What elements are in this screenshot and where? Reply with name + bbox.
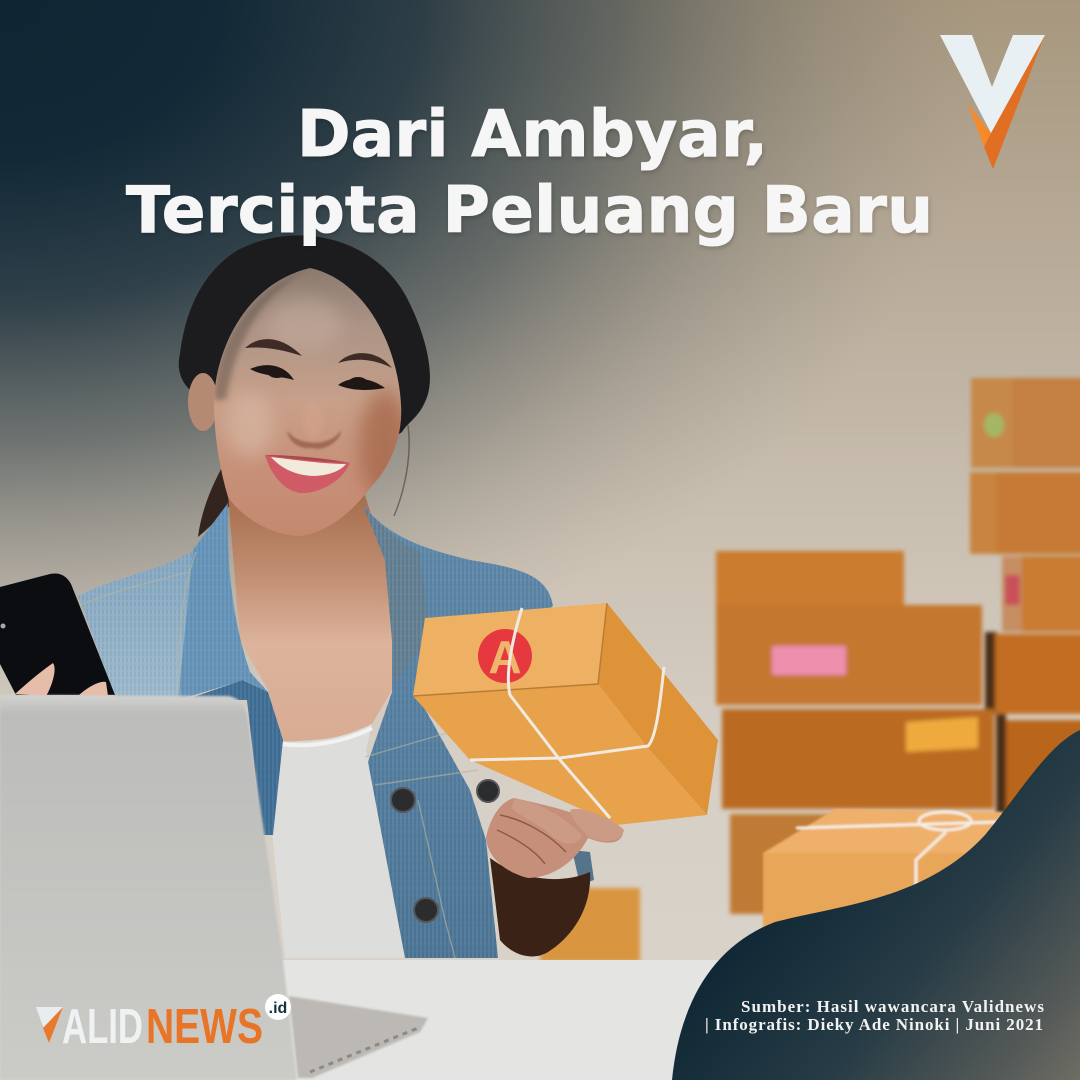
hair [179,235,430,440]
laptop base [289,996,428,1078]
source credit [705,997,1044,1034]
jacket left sleeve and shoulder [78,550,193,700]
forehead highlight [270,296,340,346]
jacket right front and shoulder [362,503,553,958]
top left dark gradient overlay [0,0,1080,740]
parcel top face [413,603,607,696]
jacket right collar [362,503,428,685]
finger creases [497,815,566,864]
ponytail [198,460,230,537]
logo: Validnews wordmark: NEWS [146,1000,263,1054]
fingers over parcel [512,798,624,844]
eyes [250,365,294,380]
jacket buttons [391,780,499,922]
source credit: | Infografis: Dieky Ade Ninoki | Juni 2021 [705,1015,1043,1034]
desk [280,960,725,1080]
left cheek highlight [226,393,274,457]
jacket left front [185,680,283,835]
jacket stitching [78,552,478,958]
woman [78,235,623,958]
jacket left collar [178,503,268,700]
title: Tercipta Peluang Baru [126,173,933,248]
string [470,608,664,818]
logo: V mark top right [940,35,1045,169]
right cheek shading [359,390,411,500]
hand [486,798,623,878]
source credit: Sumber: Hasil wawancara Validnews [741,997,1044,1016]
denim texture [78,503,553,958]
background boxes [540,378,1080,962]
sleeve [572,850,594,885]
foreground parcel behind wave [763,809,1003,928]
held parcel [413,603,718,825]
stray hair strand [394,425,409,516]
logo: Validnews wordmark: ALID [62,1000,143,1054]
title: Dari Ambyar, [297,97,768,172]
mouth [265,455,350,493]
white top [272,724,405,958]
sticker letter: A [488,631,522,683]
nose [287,430,341,449]
wave panel bottom right [672,730,1080,1080]
parcel right side [598,603,718,815]
logo: Validnews wordmark [36,994,291,1054]
eyebrows [245,339,302,356]
ear [188,373,218,431]
face [214,268,402,536]
red sticker [478,629,532,683]
phone [0,573,115,696]
forearm [490,858,590,956]
laptop [0,695,428,1080]
parcel bottom [413,684,707,825]
title [126,97,933,248]
logo: Validnews wordmark: .id [269,1000,287,1017]
neck and chest [228,495,392,742]
temple shade [214,275,296,403]
